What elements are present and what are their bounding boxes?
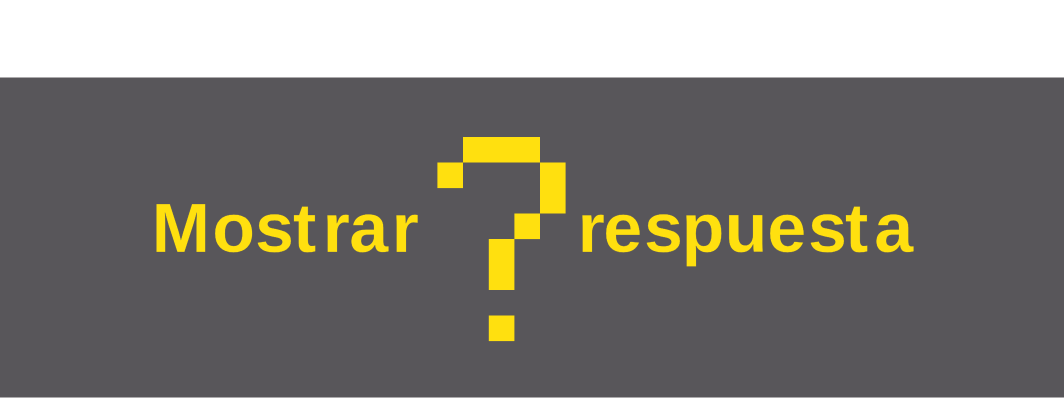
panel: dark grey band [0, 78, 1064, 398]
text: respuesta: respuesta [578, 189, 914, 267]
text: Mostrar: Mostrar [152, 189, 419, 267]
icon: pixel question mark [437, 137, 566, 341]
